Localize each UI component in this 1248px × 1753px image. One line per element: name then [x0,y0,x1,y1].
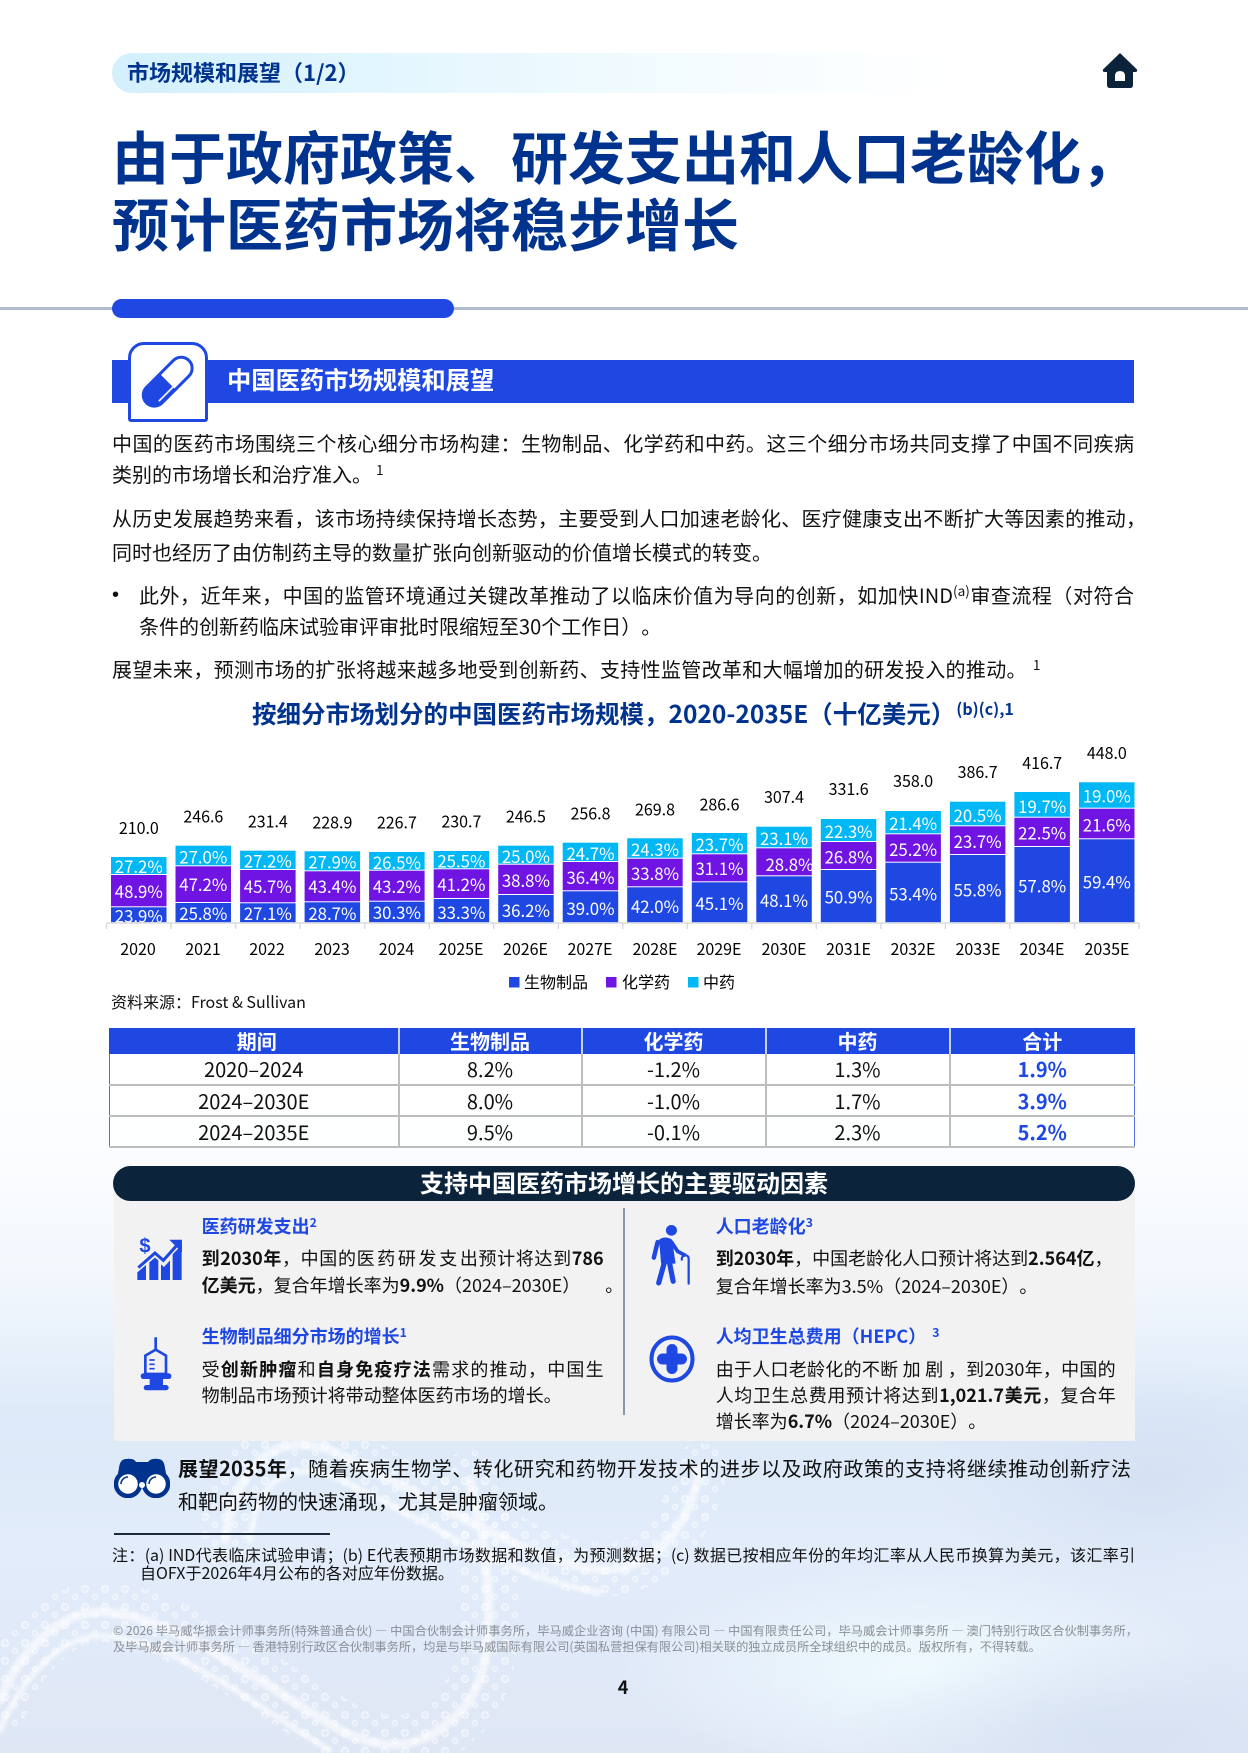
bar 2021: 27.0% [179,844,227,868]
copyright: © 2026 毕马威华振会计师事务所(特殊普通合伙) — 中国合伙制会计师事务所，毕马威企业咨询 (中国) 有限公司 — 中国有限责任公司，毕马威会计师事务所 — 澳门特别行政区合伙制事务所， [113,1621,1138,1639]
bar 2033E: 23.7% [954,829,1002,853]
driver: R&D spending [137,1213,623,1298]
panel: key drivers [114,1190,1135,1441]
driver text: 到2030年，中国的医药研发支出预计将达到786 [202,1245,604,1271]
title [112,114,1138,262]
paragraph: historical trend: 从历史发展趋势来看，该市场持续保持增长态势，主要受到人口加速老龄化、医疗健康支出不断扩大等因素的推动， [112,503,1146,532]
icon: syringe [140,1337,172,1390]
chart title: 按细分市场划分的中国医药市场规模，2020-2035E（十亿美元）(b)(c),1 [252,696,1014,731]
bar 2030E: 48.1% [760,888,808,912]
chart legend [509,969,735,993]
outlook statement: 展望2035年，随着疾病生物学、转化研究和药物开发技术的进步以及政府政策的支持将继续推动创新疗法 [178,1453,1131,1482]
CAGR table: 合计 [1022,1026,1062,1055]
footnote rule [114,1533,330,1535]
paragraph: outlook: 展望未来，预测市场的扩张将越来越多地受到创新药、支持性监管改革和大幅增加的研发投入的推动。 1 [112,654,1041,683]
bullet: regulatory reform [112,580,1134,640]
x axis labels: 2035E [1085,936,1129,960]
bullet: regulatory reform: 条件的创新药临床试验审评审批时限缩短至30个工作日）。 [139,611,661,640]
icon: elderly person with cane [652,1225,690,1286]
drivers banner [113,1166,1135,1201]
section tag text: 市场规模和展望（1/2） [127,56,359,88]
CAGR table: 9.5% [467,1116,513,1146]
CAGR table: 期间 [237,1026,277,1055]
bar 2035E: 59.4% [1083,870,1131,894]
footnotes: 注：(a) IND代表临床试验申请；(b) E代表预期市场数据和数值，为预测数据；(c) 数据已按相应年份的年均汇率从人民币换算为美元，该汇率引 [112,1542,1135,1566]
bar 2031E: 22.3% [825,819,873,843]
paragraph: market overview [112,428,1134,488]
bar 2029E [692,791,747,922]
driver: biologics growth: 物制品市场预计将带动整体医药市场的增长。 [202,1382,562,1408]
x axis labels: 2029E [697,936,741,960]
panel divider [623,1208,625,1415]
bar 2026E: 246.5 [506,803,546,827]
icon: capsule [142,356,194,408]
page number: 4 [618,1674,628,1700]
bar 2024: 30.3% [373,900,421,924]
bar 2034E: 22.5% [1018,820,1066,844]
x axis labels: 2028E [633,936,677,960]
icon: home [1102,53,1138,88]
bar 2029E: 45.1% [695,891,744,915]
driver: HEPC [650,1323,1116,1434]
bar 2028E: 269.8 [635,796,675,820]
driver: population aging: 复合年增长率为3.5%（2024–2030E）。 [716,1273,1037,1299]
driver heading: 人口老龄化3 [716,1213,813,1239]
bar 2035E [1079,740,1134,922]
x axis labels: 2030E [762,936,806,960]
x axis labels: 2020 [120,936,156,960]
driver heading: 生物制品细分市场的增长1 [202,1323,407,1349]
bar 2021: 25.8% [179,901,227,925]
CAGR table: 8.0% [467,1086,513,1114]
x axis labels: 2023 [314,936,350,960]
bar 2034E [1014,750,1070,922]
bar 2032E [885,768,941,922]
chart legend: 中药 [703,969,735,993]
bar 2027E: 39.0% [566,896,615,920]
driver heading: 医药研发支出2 [202,1213,317,1239]
title divider [0,307,1248,310]
bar 2032E: 21.4% [889,811,937,835]
bar 2031E: 26.8% [825,844,873,868]
copyright: 及毕马威会计师事务所 — 香港特别行政区合伙制事务所，均是与毕马威国际有限公司(英国私营担保有限公司)相关联的独立成员所全球组织中的成员。版权所有，不得转载。 [113,1637,1041,1655]
x axis labels: 2034E [1020,936,1064,960]
CAGR table: 2024–2035E [198,1116,309,1146]
CAGR table: 2024–2030E [198,1086,309,1114]
bar 2025E: 41.2% [437,872,485,896]
x axis labels: 2033E [956,936,1000,960]
x axis labels: 2025E [439,936,483,960]
icon: capsule tab [128,342,208,422]
bar 2020: 23.9% [115,904,163,928]
bar 2030E: 307.4 [764,784,804,808]
section heading text: 中国医药市场规模和展望 [227,361,494,396]
bar 2026E: 36.2% [502,898,550,922]
bar 2023 [305,809,360,925]
bar 2023: 228.9 [312,809,353,833]
CAGR table: 5.2% [1018,1116,1067,1146]
bar 2025E [434,808,489,924]
bar 2020: 27.2% [115,854,163,878]
title: 由于政府政策、研发支出和人口老龄化， [112,114,1138,196]
CAGR table: -1.2% [647,1054,700,1083]
driver text: 由于人口老龄化的不断 加 剧 ，到2030年，中国的 [716,1356,1116,1382]
icon: binoculars [114,1458,170,1498]
bar 2022 [240,808,296,925]
bar 2029E: 286.6 [700,791,740,815]
driver: population aging [652,1213,1113,1299]
driver: R&D spending: 亿美元，复合年增长率为9.9%（2024–2030E） 。 [202,1272,623,1298]
bar 2030E: 28.8% [765,852,814,876]
title: 预计医药市场将稳步增长 [112,180,739,262]
bar 2024 [369,809,425,924]
bar 2033E: 386.7 [958,759,998,783]
bar 2023: 27.9% [308,850,356,874]
drivers banner: 支持中国医药市场增长的主要驱动因素 [420,1164,828,1199]
bar 2032E: 53.4% [889,882,937,906]
bar 2021: 47.2% [179,872,227,896]
bullet: regulatory reform: • [112,584,119,606]
footnotes [112,1542,1135,1584]
bar 2032E: 358.0 [893,768,933,792]
section header bar [112,360,1134,403]
x axis labels: 2024 [379,936,414,960]
CAGR table: 8.2% [467,1054,513,1083]
outlook statement: 和靶向药物的快速涌现，尤其是肿瘤领域。 [178,1486,558,1515]
bar 2020: 210.0 [119,815,159,839]
bar 2024: 226.7 [377,809,417,833]
x axis labels: 2026E [503,936,548,960]
CAGR table: -1.0% [647,1086,700,1114]
icon: rising chart with dollar: $ [139,1235,151,1257]
bar 2021 [176,803,231,925]
bar 2033E: 20.5% [954,803,1002,827]
CAGR table: 3.9% [1018,1086,1067,1114]
CAGR table: 2.3% [834,1116,881,1146]
bar 2023: 43.4% [308,874,356,898]
stacked bar chart [106,740,1140,993]
bar 2027E: 256.8 [571,800,611,824]
outlook statement [178,1453,1131,1515]
driver: HEPC: 增长率为6.7%（2024–2030E）。 [716,1408,986,1434]
section tag pill [112,53,1042,93]
bar 2027E: 24.7% [566,841,615,865]
footnotes: 自OFX于2026年4月公布的各对应年份数据。 [140,1560,454,1584]
bar 2022: 27.2% [244,848,292,872]
CAGR table: 化学药 [644,1026,704,1055]
CAGR table: 中药 [838,1026,878,1055]
chart legend: 化学药 [622,969,670,993]
bar 2031E: 50.9% [825,884,873,908]
paragraph: market overview: 类别的市场增长和治疗准入。 1 [112,459,384,488]
driver: biologics growth [140,1323,604,1408]
driver: HEPC: 人均卫生总费用预计将达到1,021.7美元，复合年 [716,1382,1116,1408]
bar 2023: 28.7% [308,901,356,925]
bar 2034E: 416.7 [1022,750,1062,774]
bar 2025E: 230.7 [441,808,482,832]
chart legend: 生物制品 [524,969,588,993]
CAGR table: 1.7% [834,1086,881,1114]
CAGR table: 1.3% [834,1054,881,1083]
bar 2020 [108,815,170,928]
bar 2028E [627,796,683,922]
bar 2033E [950,759,1005,922]
bar 2027E [563,800,618,922]
paragraph: historical trend [112,503,1146,566]
bar 2030E [756,784,814,922]
x axis labels: 2022 [249,936,285,960]
icon: medical cross [650,1336,694,1382]
bar 2026E: 38.8% [502,868,550,892]
bar 2033E: 55.8% [954,878,1002,902]
bar 2029E: 31.1% [695,856,744,880]
CAGR table: -0.1% [647,1116,700,1146]
CAGR table: 2020–2024 [204,1054,304,1083]
CAGR table: 1.9% [1018,1054,1067,1083]
x axis labels [120,936,1129,960]
bar 2024: 43.2% [373,874,421,898]
bar 2026E [498,803,554,922]
bar 2028E: 42.0% [631,894,679,918]
bar 2035E: 21.6% [1083,812,1131,836]
bar 2028E: 33.8% [631,861,679,885]
bar 2034E: 57.8% [1018,874,1066,898]
bar 2029E: 23.7% [695,832,744,856]
x axis labels: 2032E [891,936,935,960]
bar 2030E: 23.1% [760,826,808,850]
bar 2034E: 19.7% [1018,794,1066,818]
bar 2028E: 24.3% [631,837,679,861]
driver text: 到2030年，中国老龄化人口预计将达到2.564亿， [716,1245,1113,1271]
bullet: regulatory reform: 此外，近年来，中国的监管环境通过关键改革推动了以临床价值为导向的创新，如加快IND(a)审查流程（对符合 [139,580,1134,609]
bar 2032E: 25.2% [889,837,937,861]
paragraph: market overview: 中国的医药市场围绕三个核心细分市场构建：生物制品、化学药和中药。这三个细分市场共同支撑了中国不同疾病 [112,428,1134,457]
driver text: 受创新肿瘤和自身免疫疗法需求的推动，中国生 [202,1356,604,1382]
copyright [113,1621,1138,1655]
driver heading: 人均卫生总费用（HEPC） 3 [716,1323,939,1349]
bar 2026E: 25.0% [502,844,550,868]
chart source: 资料来源：Frost & Sullivan [111,989,306,1013]
CAGR table [109,1026,1135,1148]
bar 2035E: 448.0 [1087,740,1127,764]
bar 2035E: 19.0% [1083,784,1131,808]
icon: rising chart with dollar [137,1235,182,1280]
x axis labels: 2031E [826,936,871,960]
bar 2022: 231.4 [248,808,288,832]
bar 2031E: 331.6 [829,776,869,800]
paragraph: historical trend: 同时也经历了由仿制药主导的数量扩张向创新驱动的价值增长模式的转变。 [112,537,772,566]
bar 2027E: 36.4% [566,865,615,889]
bar 2025E: 25.5% [437,848,485,872]
CAGR table: 生物制品 [450,1026,530,1055]
bar 2031E [821,776,876,922]
x axis labels: 2021 [185,936,221,960]
bar 2024: 26.5% [373,850,421,874]
bar 2021: 246.6 [183,803,223,827]
bar 2022: 45.7% [244,874,292,898]
bar 2022: 27.1% [244,901,292,925]
x axis labels: 2027E [568,936,612,960]
bar 2020: 48.9% [115,879,163,903]
title accent bar [112,299,454,318]
bar 2025E: 33.3% [437,900,485,924]
